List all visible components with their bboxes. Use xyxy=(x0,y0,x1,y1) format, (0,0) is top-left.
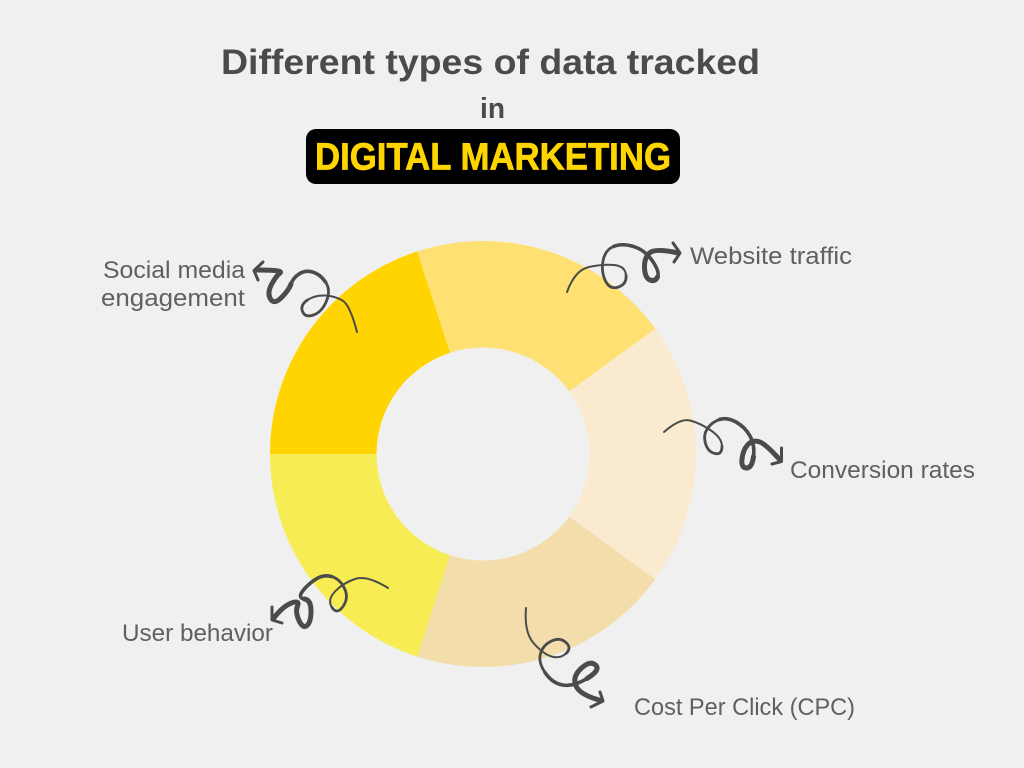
slice: conversion rates xyxy=(569,329,696,579)
label: cost per click: Cost Per Click (CPC) xyxy=(634,694,855,721)
subtitle: in: in xyxy=(480,93,505,125)
label: social media engagement: engagement xyxy=(101,285,245,312)
label: website traffic: Website traffic xyxy=(690,243,852,270)
label: conversion rates: Conversion rates xyxy=(790,457,975,484)
label: social media engagement: Social media xyxy=(103,257,246,284)
arrow: website traffic xyxy=(567,243,680,292)
title: Different types of data tracked xyxy=(221,43,760,82)
slice: cost per click xyxy=(417,517,655,667)
slice: user behavior xyxy=(270,454,450,657)
arrow: user behavior xyxy=(272,576,388,627)
label: social media engagement xyxy=(101,257,246,312)
arrow: social media engagement xyxy=(254,262,357,332)
arrow: conversion rates xyxy=(664,419,782,468)
heading badge: digital marketing: DIGITAL MARKETING xyxy=(315,136,671,178)
slice: social media engagement xyxy=(270,251,450,454)
arrow: cost per click xyxy=(526,608,603,707)
slice: website traffic xyxy=(417,241,655,391)
donut chart xyxy=(270,241,696,667)
label: user behavior: User behavior xyxy=(122,620,273,647)
